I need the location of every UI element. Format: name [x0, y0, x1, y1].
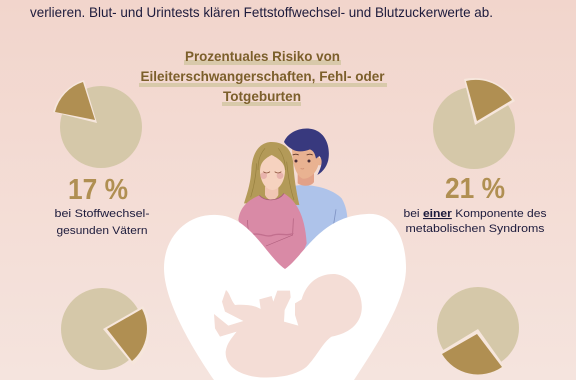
intro text: verlieren. Blut- und Urintests klären Fettstoffwechsel- und Blutzuckerwerte ab. [30, 4, 493, 20]
illustration: couple [238, 128, 348, 277]
heading: Eileiterschwangerschaften, Fehl- oder [140, 68, 385, 84]
pie chart: 21 % [433, 78, 515, 169]
value: 17 %: 17 % [68, 174, 128, 206]
pie chart: 17 % [53, 80, 142, 168]
label: 17 %: bei Stoffwechsel- [54, 208, 150, 220]
man [284, 128, 348, 273]
pie chart: bottom left [61, 288, 150, 370]
heading: Prozentuales Risiko von [185, 48, 340, 64]
heading [139, 48, 387, 106]
label: 17 %: gesunden Vätern [56, 225, 148, 237]
label: 17 % [54, 208, 150, 237]
pie chart: bottom right [437, 287, 519, 375]
woman [238, 142, 307, 277]
heart [164, 214, 406, 380]
label: 21 %: metabolischen Syndroms [406, 223, 545, 235]
heading: Totgeburten [223, 88, 301, 104]
fetus silhouette [214, 274, 362, 378]
value: 21 %: 21 % [445, 173, 505, 205]
label: 21 %: bei einer Komponente des [404, 208, 547, 220]
label: 21 % [404, 208, 547, 235]
